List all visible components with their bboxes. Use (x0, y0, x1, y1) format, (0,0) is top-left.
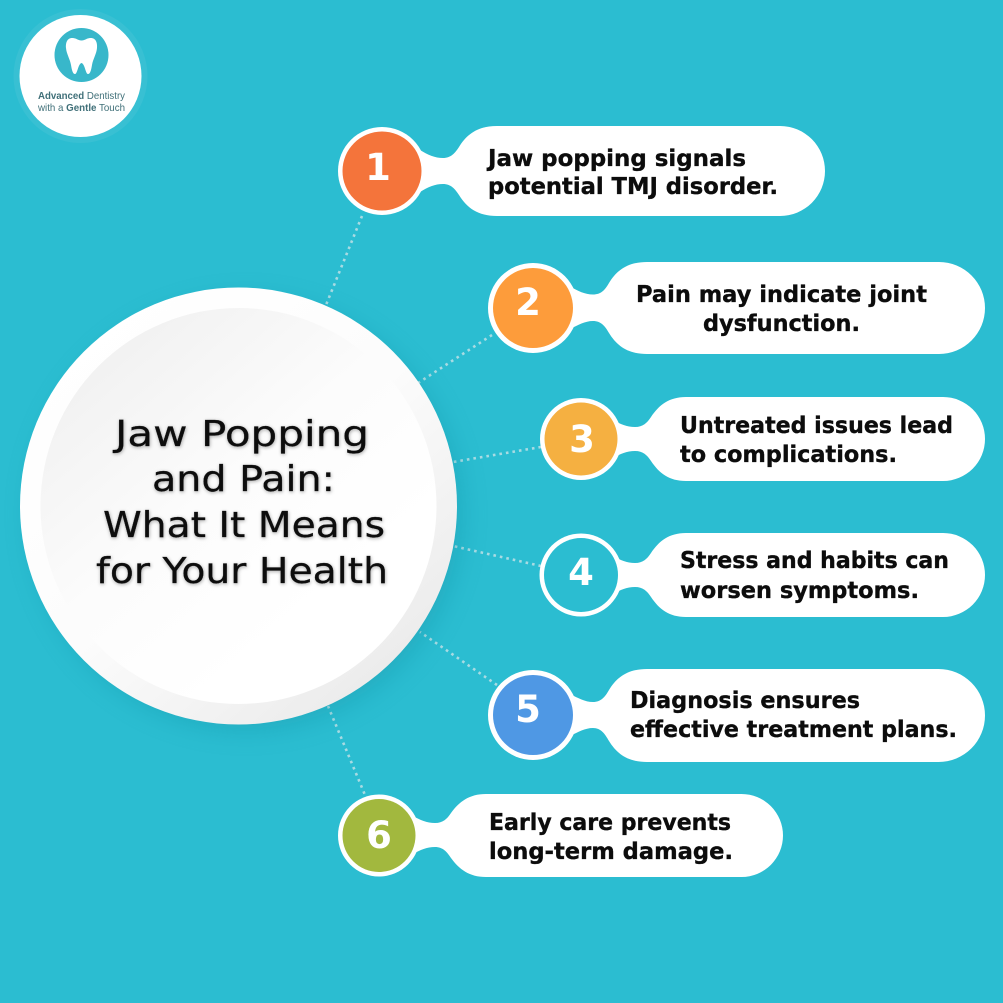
item 4 (540, 533, 985, 617)
item 3: Untreated issues lead (680, 413, 953, 439)
item 2: Pain may indicate joint (636, 282, 927, 308)
item 6: Early care prevents (489, 810, 731, 836)
logo text (37, 90, 126, 114)
title: and Pain: (152, 459, 335, 500)
item 5 (488, 669, 985, 762)
icon: tooth (54, 28, 108, 82)
dotted connectors (326, 216, 541, 795)
item 6: 6 (366, 814, 392, 857)
item 4: 4 (568, 551, 594, 594)
item 2: dysfunction. (703, 311, 860, 337)
title: What It Means (103, 505, 385, 546)
item 6 (338, 794, 783, 877)
item 3: to complications. (680, 442, 897, 468)
item 1: 1 (365, 146, 391, 189)
item 2 (488, 262, 985, 354)
title: Jaw Popping (113, 414, 369, 455)
item 2: 2 (515, 281, 541, 324)
item 5: Diagnosis ensures (630, 688, 860, 714)
item 1 (338, 126, 825, 216)
item 5: effective treatment plans. (630, 717, 957, 743)
logo text: with a Gentle Touch (37, 102, 125, 114)
central circle (20, 288, 460, 728)
logo text: Advanced Dentistry (38, 90, 126, 102)
title (96, 414, 388, 592)
title: for Your Health (96, 551, 388, 592)
item 1: potential TMJ disorder. (488, 174, 778, 200)
item 4: Stress and habits can (680, 548, 949, 574)
item 3 (540, 397, 985, 481)
item 5: 5 (515, 688, 541, 731)
item 6: long-term damage. (489, 839, 733, 865)
item 4: worsen symptoms. (680, 578, 919, 604)
item 3: 3 (569, 418, 595, 461)
item 1: Jaw popping signals (486, 146, 746, 172)
logo (14, 9, 148, 143)
